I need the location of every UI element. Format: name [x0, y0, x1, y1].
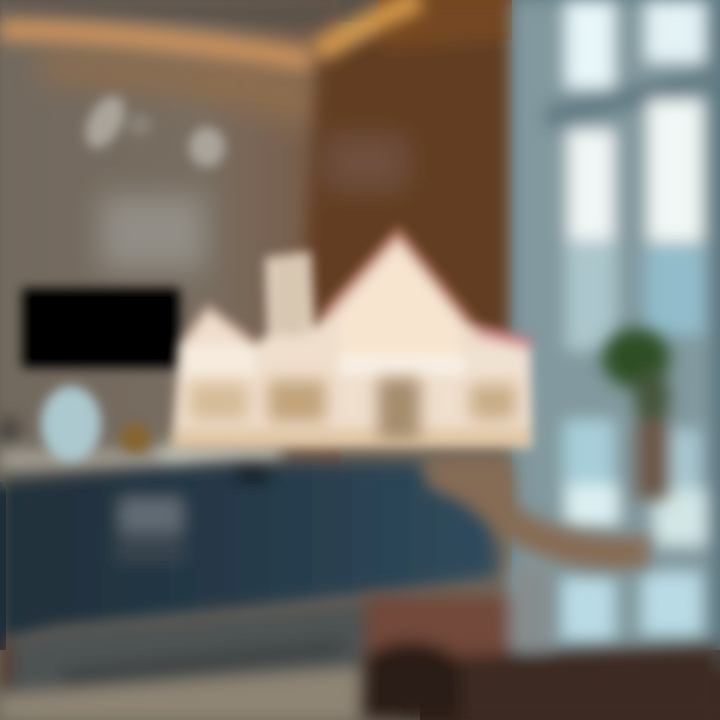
warm ceiling light strip — [0, 0, 420, 60]
window panes — [566, 0, 614, 88]
ceiling — [0, 0, 370, 30]
left wall — [0, 0, 340, 490]
house model — [172, 232, 532, 448]
foreground table — [362, 565, 720, 720]
television — [22, 288, 180, 368]
plant — [602, 328, 670, 500]
navy sofa — [0, 462, 498, 642]
right brown wall — [300, 0, 512, 340]
window — [512, 0, 720, 670]
house windows and door — [190, 378, 516, 440]
rug and floor — [0, 600, 400, 720]
vase and ornament — [41, 386, 150, 462]
house roof glow — [322, 232, 472, 324]
arm holding the house — [430, 458, 650, 570]
wall pendant lights — [78, 90, 225, 167]
shelf under television — [0, 418, 280, 470]
wall art frames — [100, 135, 407, 270]
warm wash below ceiling strip — [40, 50, 320, 130]
